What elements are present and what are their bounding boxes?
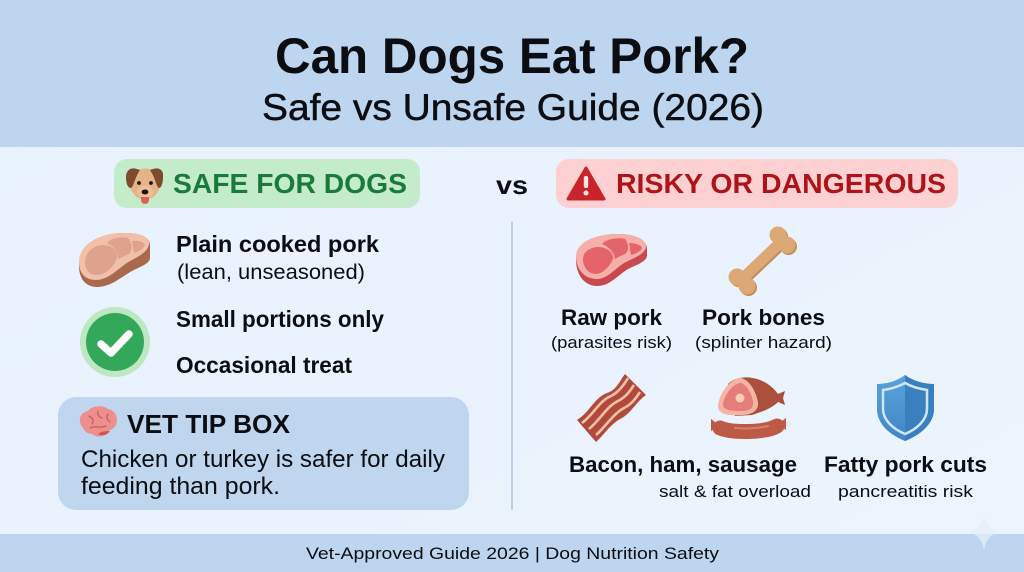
vet tip body bbox=[81, 446, 445, 500]
vet tip body: feeding than pork. bbox=[81, 473, 280, 500]
bacon ham sausage label: Bacon, ham, sausage bbox=[569, 452, 797, 477]
header band bbox=[0, 0, 1024, 147]
vs label: vs bbox=[496, 170, 528, 200]
risky item: raw pork bbox=[551, 234, 672, 352]
safe item: portions and treat bbox=[80, 306, 384, 378]
fatty pork cuts label: Fatty pork cuts bbox=[824, 452, 987, 477]
subtitle: Safe vs Unsafe Guide (2026) bbox=[262, 87, 764, 128]
safe heading pill bbox=[114, 159, 420, 208]
icon: bacon bbox=[577, 374, 646, 442]
occasional treat label: Occasional treat bbox=[176, 352, 352, 378]
icon: warning triangle bbox=[568, 168, 604, 199]
title: Can Dogs Eat Pork? bbox=[275, 28, 749, 84]
salt and fat note: salt & fat overload bbox=[659, 482, 811, 501]
icon: raw pork bbox=[576, 234, 647, 286]
icon: sparkle bbox=[968, 514, 1000, 550]
vet tip heading: VET TIP BOX bbox=[127, 409, 291, 439]
plain cooked pork label: Plain cooked pork bbox=[176, 231, 379, 257]
icon: dog face bbox=[126, 168, 163, 204]
footer text: Vet-Approved Guide 2026 | Dog Nutrition Safety bbox=[306, 544, 720, 563]
pork bones note: (splinter hazard) bbox=[695, 333, 832, 352]
risky heading text: RISKY OR DANGEROUS bbox=[616, 168, 946, 199]
icon: cooked pork bbox=[79, 233, 150, 287]
icon: shield bbox=[877, 375, 934, 441]
panel: vet tip box bbox=[58, 397, 469, 510]
raw pork label: Raw pork bbox=[561, 305, 663, 330]
risky item: pork bones bbox=[695, 226, 832, 352]
icon: brain bbox=[80, 406, 117, 436]
icon: green check bbox=[80, 307, 150, 377]
safe item: plain cooked pork bbox=[79, 231, 379, 287]
icon: ham bbox=[712, 377, 785, 432]
raw pork note: (parasites risk) bbox=[551, 333, 672, 352]
risky heading pill bbox=[556, 159, 958, 208]
icon: bone bbox=[728, 226, 797, 296]
small portions label: Small portions only bbox=[176, 306, 384, 332]
risky item: bacon ham sausage bbox=[569, 374, 811, 501]
sausage bbox=[720, 426, 777, 432]
pork bones label: Pork bones bbox=[702, 305, 825, 330]
risky item: fatty pork cuts bbox=[824, 375, 987, 501]
vet tip body: Chicken or turkey is safer for daily bbox=[81, 446, 445, 473]
footer band bbox=[0, 514, 1024, 572]
plain cooked pork note: (lean, unseasoned) bbox=[177, 261, 365, 284]
column divider bbox=[511, 222, 513, 510]
safe heading text: SAFE FOR DOGS bbox=[173, 168, 407, 199]
pancreatitis note: pancreatitis risk bbox=[838, 482, 974, 501]
